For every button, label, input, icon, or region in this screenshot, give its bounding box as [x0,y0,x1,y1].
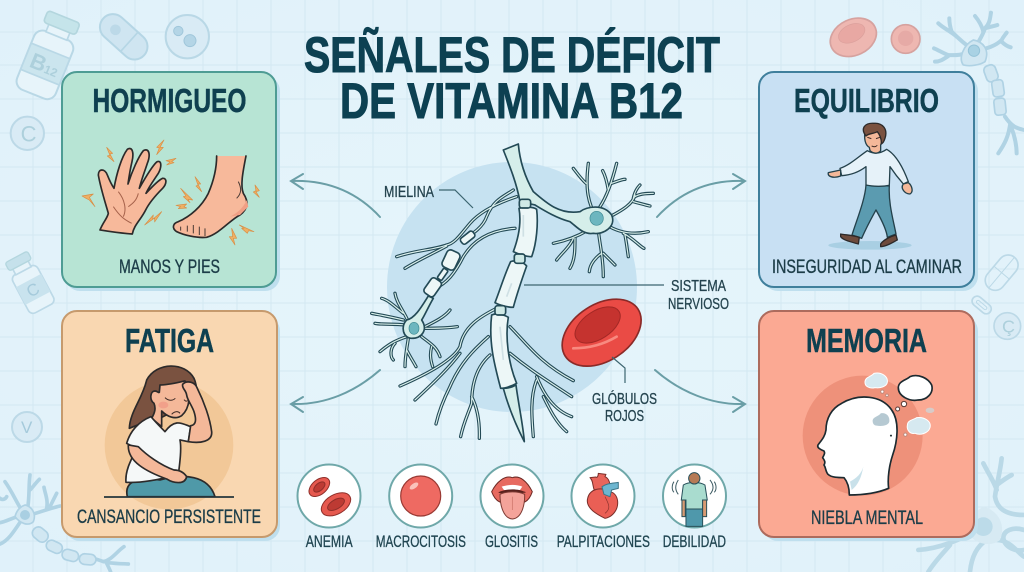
symptom: debilidad [663,464,726,551]
caption: cansancio persistente: CANSANCIO PERSISTENTE [77,507,261,528]
decorative icon: B12 bottle [14,9,84,102]
icon: hand and foot with tingling [82,140,259,245]
panel: fatiga [62,311,280,541]
arrow: to memoria [655,370,745,412]
caption: inseguridad al caminar: INSEGURIDAD AL CAMINAR [772,257,962,278]
panel: memoria [759,311,978,541]
label: mielina [384,184,473,208]
decorative icon: vitamin V badge [12,412,42,442]
arrow: to equilibrio [657,174,745,217]
symptom: glositis [480,464,544,551]
decorative icon: B12 bottle: B12 [26,48,63,82]
label: mielina: MIELINA [384,184,435,201]
label: sistema nervioso: SISTEMA [671,278,727,295]
caption: niebla mental: NIEBLA MENTAL [811,508,923,529]
decorative pills right: Ç [1002,317,1015,337]
neuron illustration [372,144,653,442]
decorative icon: vitamin C badge: C [21,121,37,146]
arrow: to hormigueo [291,174,380,217]
icon: head with thought clouds [803,373,934,496]
symptom: macrocitosis: MACROCITOSIS [376,533,466,551]
label: globulos rojos [592,357,657,425]
icon: red blood cell [550,285,653,380]
icon: tired woman [104,366,234,509]
decorative icon: cell [166,15,209,58]
central illustration: nervous system [372,144,729,442]
decorative neuron: bottom left [0,475,128,572]
heading: fatiga: FATIGA [125,322,214,359]
label: sistema nervioso [524,278,729,313]
symptom: palpitaciones [557,464,650,551]
label: globulos rojos: GLÓBULOS [592,391,657,408]
heading: equilibrio: EQUILIBRIO [794,82,939,119]
arrow: to fatiga [291,370,380,412]
symptom: macrocitosis [376,464,466,551]
decorative icon: vitamin C bottle: C [23,279,43,301]
symptom row [298,464,726,551]
symptom: debilidad: DEBILIDAD [663,533,726,551]
symptom: anemia [298,464,360,551]
decorative icon: capsule [95,9,153,65]
symptom: palpitaciones: PALPITACIONES [557,533,650,551]
decorative icon: vitamin C bottle [3,250,56,315]
heading: hormigueo: HORMIGUEO [92,82,246,119]
symptom: glositis: GLOSITIS [485,533,538,551]
icon: walking man [828,123,912,250]
panel: hormigueo [62,72,280,291]
decorative pills right [970,251,1022,339]
decorative neuron: top right [934,13,1024,153]
title: DE VITAMINA B12 [340,73,683,129]
label: globulos rojos: ROJOS [605,408,644,425]
symptom: anemia: ANEMIA [306,533,353,551]
panel: equilibrio [759,72,978,291]
decorative icons: top left [11,9,209,150]
decorative neuron: bottom right [918,458,1024,572]
decorative red blood cells [824,11,920,64]
label: sistema nervioso: NERVIOSO [668,296,729,313]
heading: memoria: MEMORIA [806,322,927,359]
title: SEÑALES DE DÉFICIT [304,27,720,83]
decorative icon: vitamin V badge: V [21,418,33,437]
decorative icon: vitamin C badge [11,117,44,150]
caption: manos y pies: MANOS Y PIES [119,257,220,278]
title [304,27,720,129]
